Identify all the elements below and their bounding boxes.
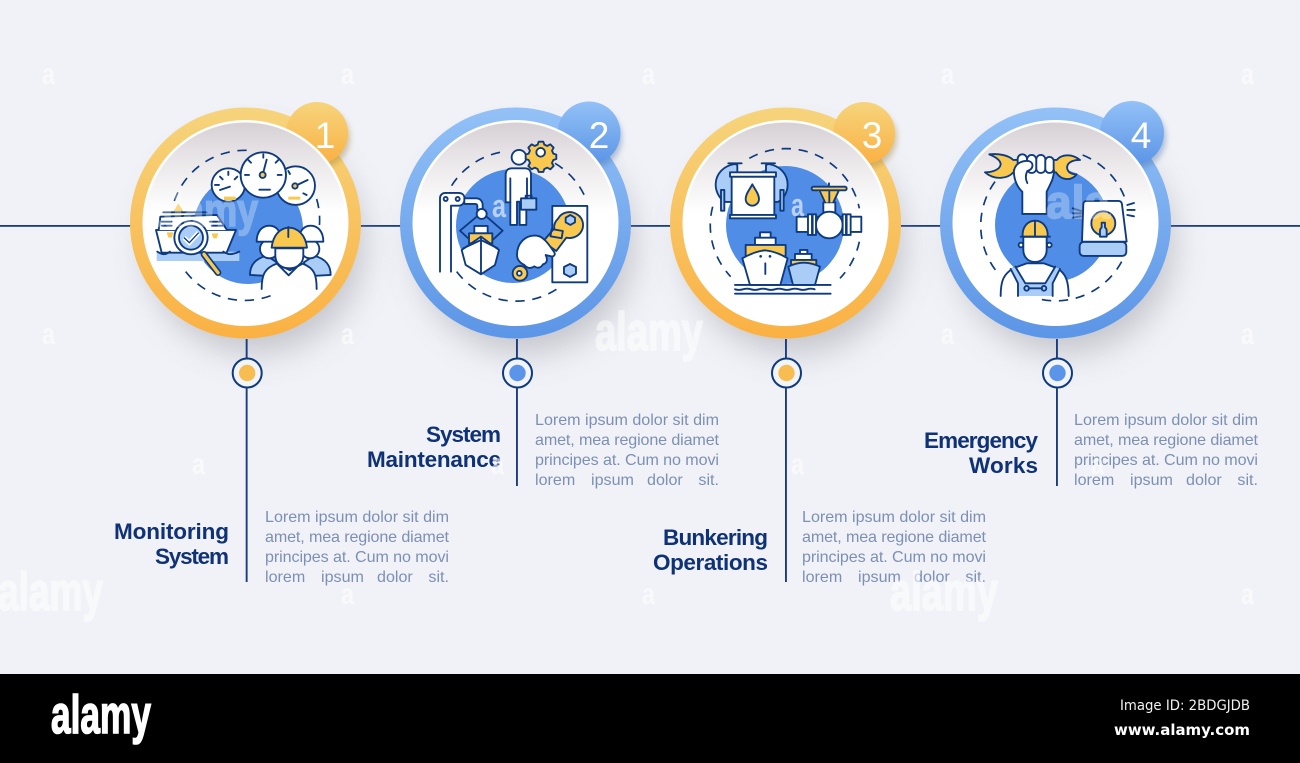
text block: step 2: ipsum bbox=[591, 471, 634, 489]
badge number 4: 4 bbox=[1131, 115, 1151, 156]
text block: step 1: ipsum bbox=[321, 568, 364, 586]
text block: step 3: principes at. Cum no movi bbox=[802, 548, 986, 566]
stock watermarks: a bbox=[341, 578, 354, 611]
text block: step 1 bbox=[265, 508, 450, 586]
footer logo: alamy bbox=[51, 685, 151, 745]
stock watermarks: a bbox=[941, 58, 954, 91]
heading: Emergency Works bbox=[924, 428, 1038, 478]
stock watermarks: a bbox=[341, 318, 354, 351]
stock watermarks: alamy bbox=[0, 562, 103, 622]
text block: step 2: dolor bbox=[647, 471, 683, 489]
text block: step 4: principes at. Cum no movi bbox=[1074, 451, 1258, 469]
stock watermarks: a bbox=[1091, 448, 1104, 481]
text block: step 4: dolor bbox=[1186, 471, 1222, 489]
stock watermarks: a bbox=[492, 188, 506, 224]
footer bar bbox=[0, 674, 1300, 763]
text block: step 3 bbox=[802, 508, 987, 586]
stock watermarks: a bbox=[941, 318, 954, 351]
blue disc 1 bbox=[193, 174, 303, 284]
text block: step 2: principes at. Cum no movi bbox=[535, 451, 719, 469]
stock watermarks: a bbox=[1241, 578, 1254, 611]
heading: Bunkering Operations: Operations bbox=[653, 550, 768, 575]
stock watermarks: a bbox=[42, 58, 55, 91]
text block: step 3: ipsum bbox=[858, 568, 901, 586]
stock watermarks: a bbox=[642, 578, 655, 611]
connector and marker 2 bbox=[503, 339, 532, 486]
icon: monitoring gauges, ship and workers bbox=[156, 150, 331, 300]
text block: step 1: lorem bbox=[265, 568, 305, 586]
connector and marker 3 bbox=[772, 339, 801, 582]
icon: fuel tanks, valve and ships bbox=[710, 149, 861, 294]
text block: step 3: Lorem ipsum dolor sit dim bbox=[802, 508, 986, 526]
text block: step 4: ipsum bbox=[1130, 471, 1173, 489]
stock watermarks bbox=[0, 58, 1254, 622]
text block: step 3: sit. bbox=[965, 568, 986, 586]
connector and marker 1 bbox=[233, 339, 262, 582]
text block: step 4: Lorem ipsum dolor sit dim bbox=[1074, 411, 1258, 429]
blue disc 2 bbox=[456, 169, 570, 283]
text block: step 1: dolor bbox=[377, 568, 413, 586]
stock watermarks: a bbox=[1241, 318, 1254, 351]
panel: step 2 circle bbox=[400, 102, 633, 353]
icon: crane, engineer, ship and wrench bbox=[440, 142, 587, 301]
text block: step 4 bbox=[1074, 411, 1259, 489]
stock watermarks: ala bbox=[1046, 176, 1110, 228]
heading: Bunkering Operations: Bunkering bbox=[663, 525, 768, 550]
stock watermarks: alamy bbox=[152, 184, 258, 236]
text block: step 1: principes at. Cum no movi bbox=[265, 548, 449, 566]
blue disc 3 bbox=[726, 166, 844, 284]
text block: step 2 bbox=[535, 411, 720, 489]
text block: step 1: amet, mea regione diamet bbox=[265, 528, 450, 546]
text block: step 2: amet, mea regione diamet bbox=[535, 431, 720, 449]
image id: Image ID: 2BDGJDB bbox=[1120, 698, 1250, 714]
heading: Emergency Works: Emergency bbox=[924, 428, 1038, 453]
stock watermarks: a bbox=[791, 448, 804, 481]
panel: step 3 circle bbox=[670, 102, 903, 353]
text block: step 3: dolor bbox=[914, 568, 950, 586]
badge number 2: 2 bbox=[589, 115, 609, 156]
heading: System Maintenance: System bbox=[426, 422, 501, 447]
stock watermarks: alamy bbox=[890, 562, 998, 622]
text block: step 3: amet, mea regione diamet bbox=[802, 528, 987, 546]
text block: step 4: sit. bbox=[1237, 471, 1258, 489]
heading: Monitoring System: Monitoring bbox=[114, 519, 229, 544]
stock watermarks: a bbox=[341, 58, 354, 91]
icon: fist with wrench, siren and mechanic bbox=[981, 154, 1135, 301]
panel: step 4 circle bbox=[940, 101, 1173, 353]
text block: step 1: Lorem ipsum dolor sit dim bbox=[265, 508, 449, 526]
text block: step 2: sit. bbox=[698, 471, 719, 489]
heading: System Maintenance: Maintenance bbox=[367, 447, 501, 472]
stock watermarks: a bbox=[192, 448, 205, 481]
stock watermarks: a bbox=[791, 187, 804, 223]
text block: step 2: lorem bbox=[535, 471, 575, 489]
timeline line bbox=[0, 225, 1300, 227]
stock watermarks: a bbox=[491, 448, 504, 481]
text block: step 4: lorem bbox=[1074, 471, 1114, 489]
panel: step 1 circle bbox=[130, 102, 363, 353]
blue disc 4 bbox=[995, 168, 1109, 282]
text block: step 3: lorem bbox=[802, 568, 842, 586]
stock watermarks: a bbox=[42, 318, 55, 351]
badge number 3: 3 bbox=[862, 115, 882, 156]
heading: System Maintenance bbox=[367, 422, 501, 472]
heading: Monitoring System: System bbox=[155, 544, 229, 569]
stock watermarks: alamy bbox=[595, 302, 703, 362]
connector and marker 4 bbox=[1043, 339, 1072, 486]
badge number 1: 1 bbox=[315, 115, 335, 156]
text block: step 1: sit. bbox=[428, 568, 449, 586]
heading: Emergency Works: Works bbox=[969, 453, 1038, 478]
website: www.alamy.com bbox=[1114, 721, 1250, 739]
heading: Monitoring System bbox=[114, 519, 229, 569]
stock watermarks: a bbox=[642, 58, 655, 91]
text block: step 2: Lorem ipsum dolor sit dim bbox=[535, 411, 719, 429]
heading: Bunkering Operations bbox=[653, 525, 768, 575]
stock watermarks: a bbox=[1241, 58, 1254, 91]
text block: step 4: amet, mea regione diamet bbox=[1074, 431, 1259, 449]
